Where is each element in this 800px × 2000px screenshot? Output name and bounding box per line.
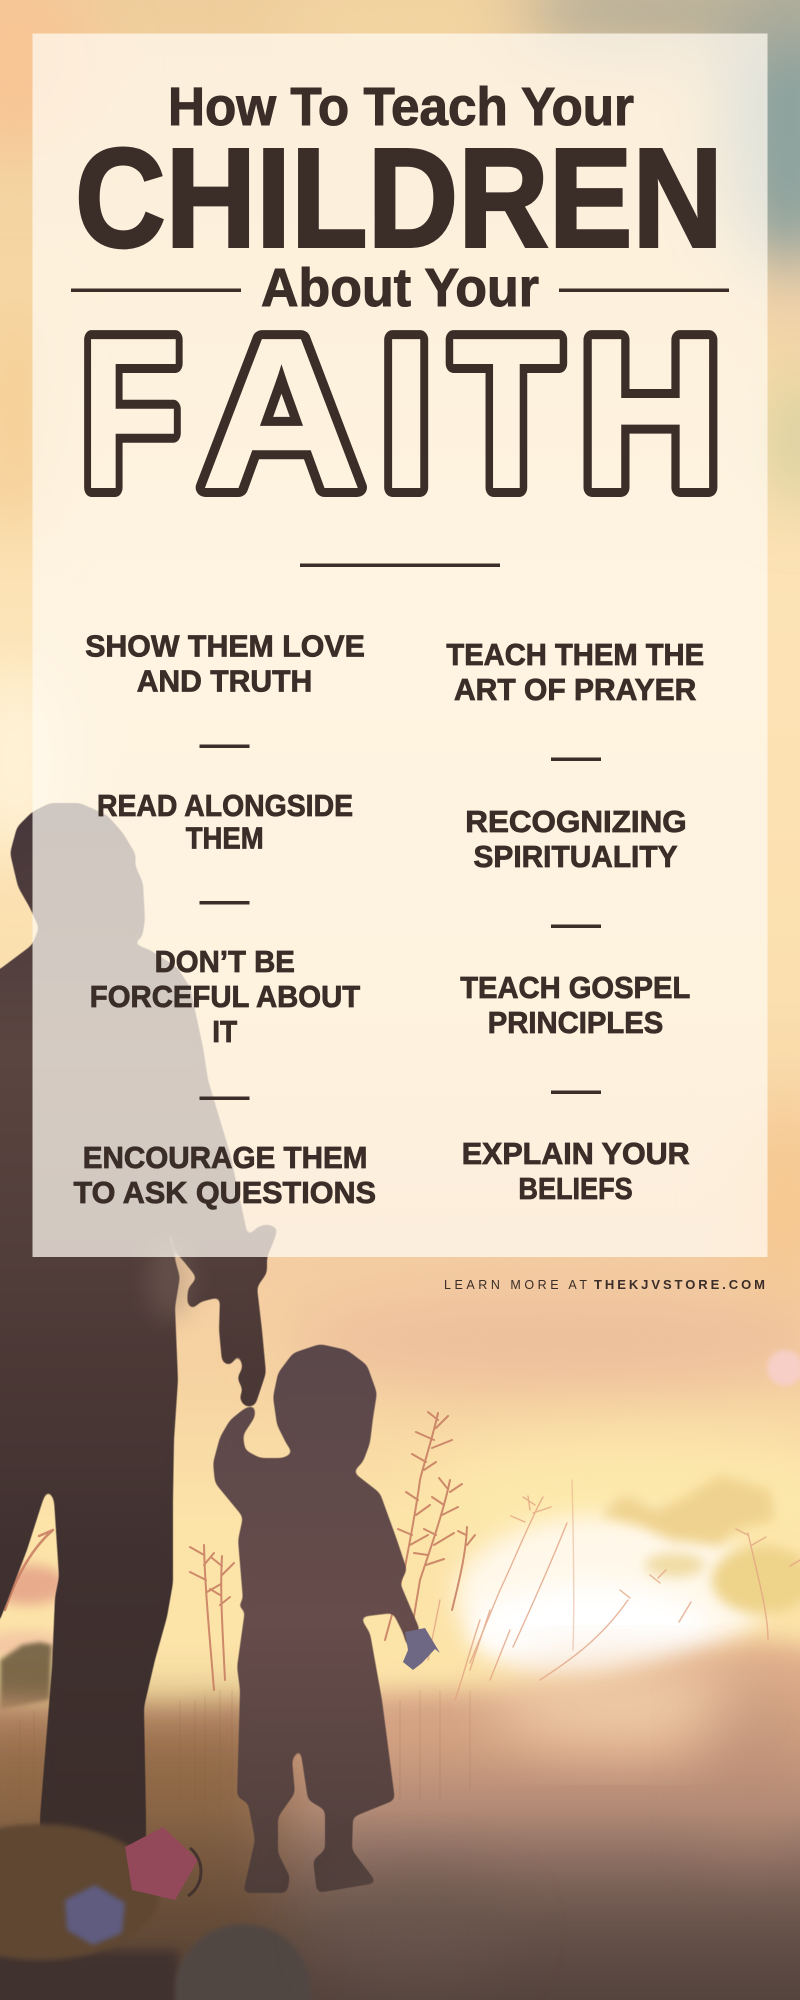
footer source credit: LEARN MORE AT <box>444 1278 587 1292</box>
heading outline: FAITH: F <box>80 292 181 534</box>
heading outline: FAITH: H <box>579 292 722 534</box>
right column <box>446 637 704 1206</box>
heading outline: FAITH: I <box>380 292 432 534</box>
item: don't be forceful about it: DON’T BE <box>155 944 295 979</box>
heading line: How To Teach Your: How To Teach Your <box>168 77 634 137</box>
item: don't be forceful about it <box>90 944 360 1049</box>
icon: pink pentagon flare <box>125 1827 198 1900</box>
heading line: CHILDREN: CHILDREN <box>75 118 723 276</box>
item: encourage them to ask questions: ENCOURAGE THEM <box>83 1140 367 1175</box>
item: read alongside them: THEM <box>186 820 264 856</box>
heading outline: FAITH <box>84 330 718 497</box>
lens flares and bottom haze <box>0 1810 800 2000</box>
item: show them love and truth <box>85 628 365 698</box>
icon: blue hexagon flare <box>65 1885 125 1945</box>
heading outline: FAITH: T <box>452 292 561 534</box>
footer source credit: THEKJVSTORE.COM <box>594 1277 765 1292</box>
item: don't be forceful about it: FORCEFUL ABOUT <box>90 979 360 1014</box>
item: teach them the art of prayer: TEACH THEM THE <box>446 637 704 672</box>
silhouette: father <box>0 803 278 1880</box>
child's hand <box>403 1628 440 1670</box>
item: encourage them to ask questions <box>74 1140 376 1210</box>
heading outline: FAITH: A <box>200 292 363 534</box>
item: explain your beliefs: EXPLAIN YOUR <box>462 1136 690 1171</box>
footer source credit <box>444 1277 765 1292</box>
item: teach gospel principles: PRINCIPLES <box>488 1005 663 1040</box>
item: show them love and truth: AND TRUTH <box>137 664 312 698</box>
item: read alongside them <box>97 788 353 856</box>
item: recognizing spirituality: SPIRITUALITY <box>474 839 678 874</box>
silhouette: child <box>213 1344 440 1893</box>
grass stalks <box>5 1412 475 1690</box>
item: don't be forceful about it: IT <box>212 1014 237 1049</box>
item: recognizing spirituality: RECOGNIZING <box>465 804 687 839</box>
item: read alongside them: READ ALONGSIDE <box>97 788 353 823</box>
title <box>71 77 729 534</box>
item: explain your beliefs: BELIEFS <box>518 1171 633 1206</box>
item: teach gospel principles: TEACH GOSPEL <box>460 970 690 1005</box>
title divider <box>300 564 500 567</box>
item: show them love and truth: SHOW THEM LOVE <box>85 628 365 664</box>
item: recognizing spirituality <box>465 804 687 874</box>
meadow grass <box>0 1640 800 2000</box>
item: teach them the art of prayer: ART OF PRAYER <box>454 672 696 707</box>
sun glow and clouds <box>420 1350 800 1675</box>
translucent panel <box>32 34 768 1257</box>
item: encourage them to ask questions: TO ASK QUESTIONS <box>74 1175 376 1210</box>
left column <box>74 628 376 1210</box>
heading row: About Your with rules: About Your <box>261 258 539 318</box>
heading row: About Your with rules <box>71 258 729 318</box>
item: explain your beliefs <box>462 1136 690 1206</box>
pink cloud and bush between legs <box>0 1565 70 1710</box>
item: teach them the art of prayer <box>446 637 704 707</box>
item: teach gospel principles <box>460 970 690 1040</box>
